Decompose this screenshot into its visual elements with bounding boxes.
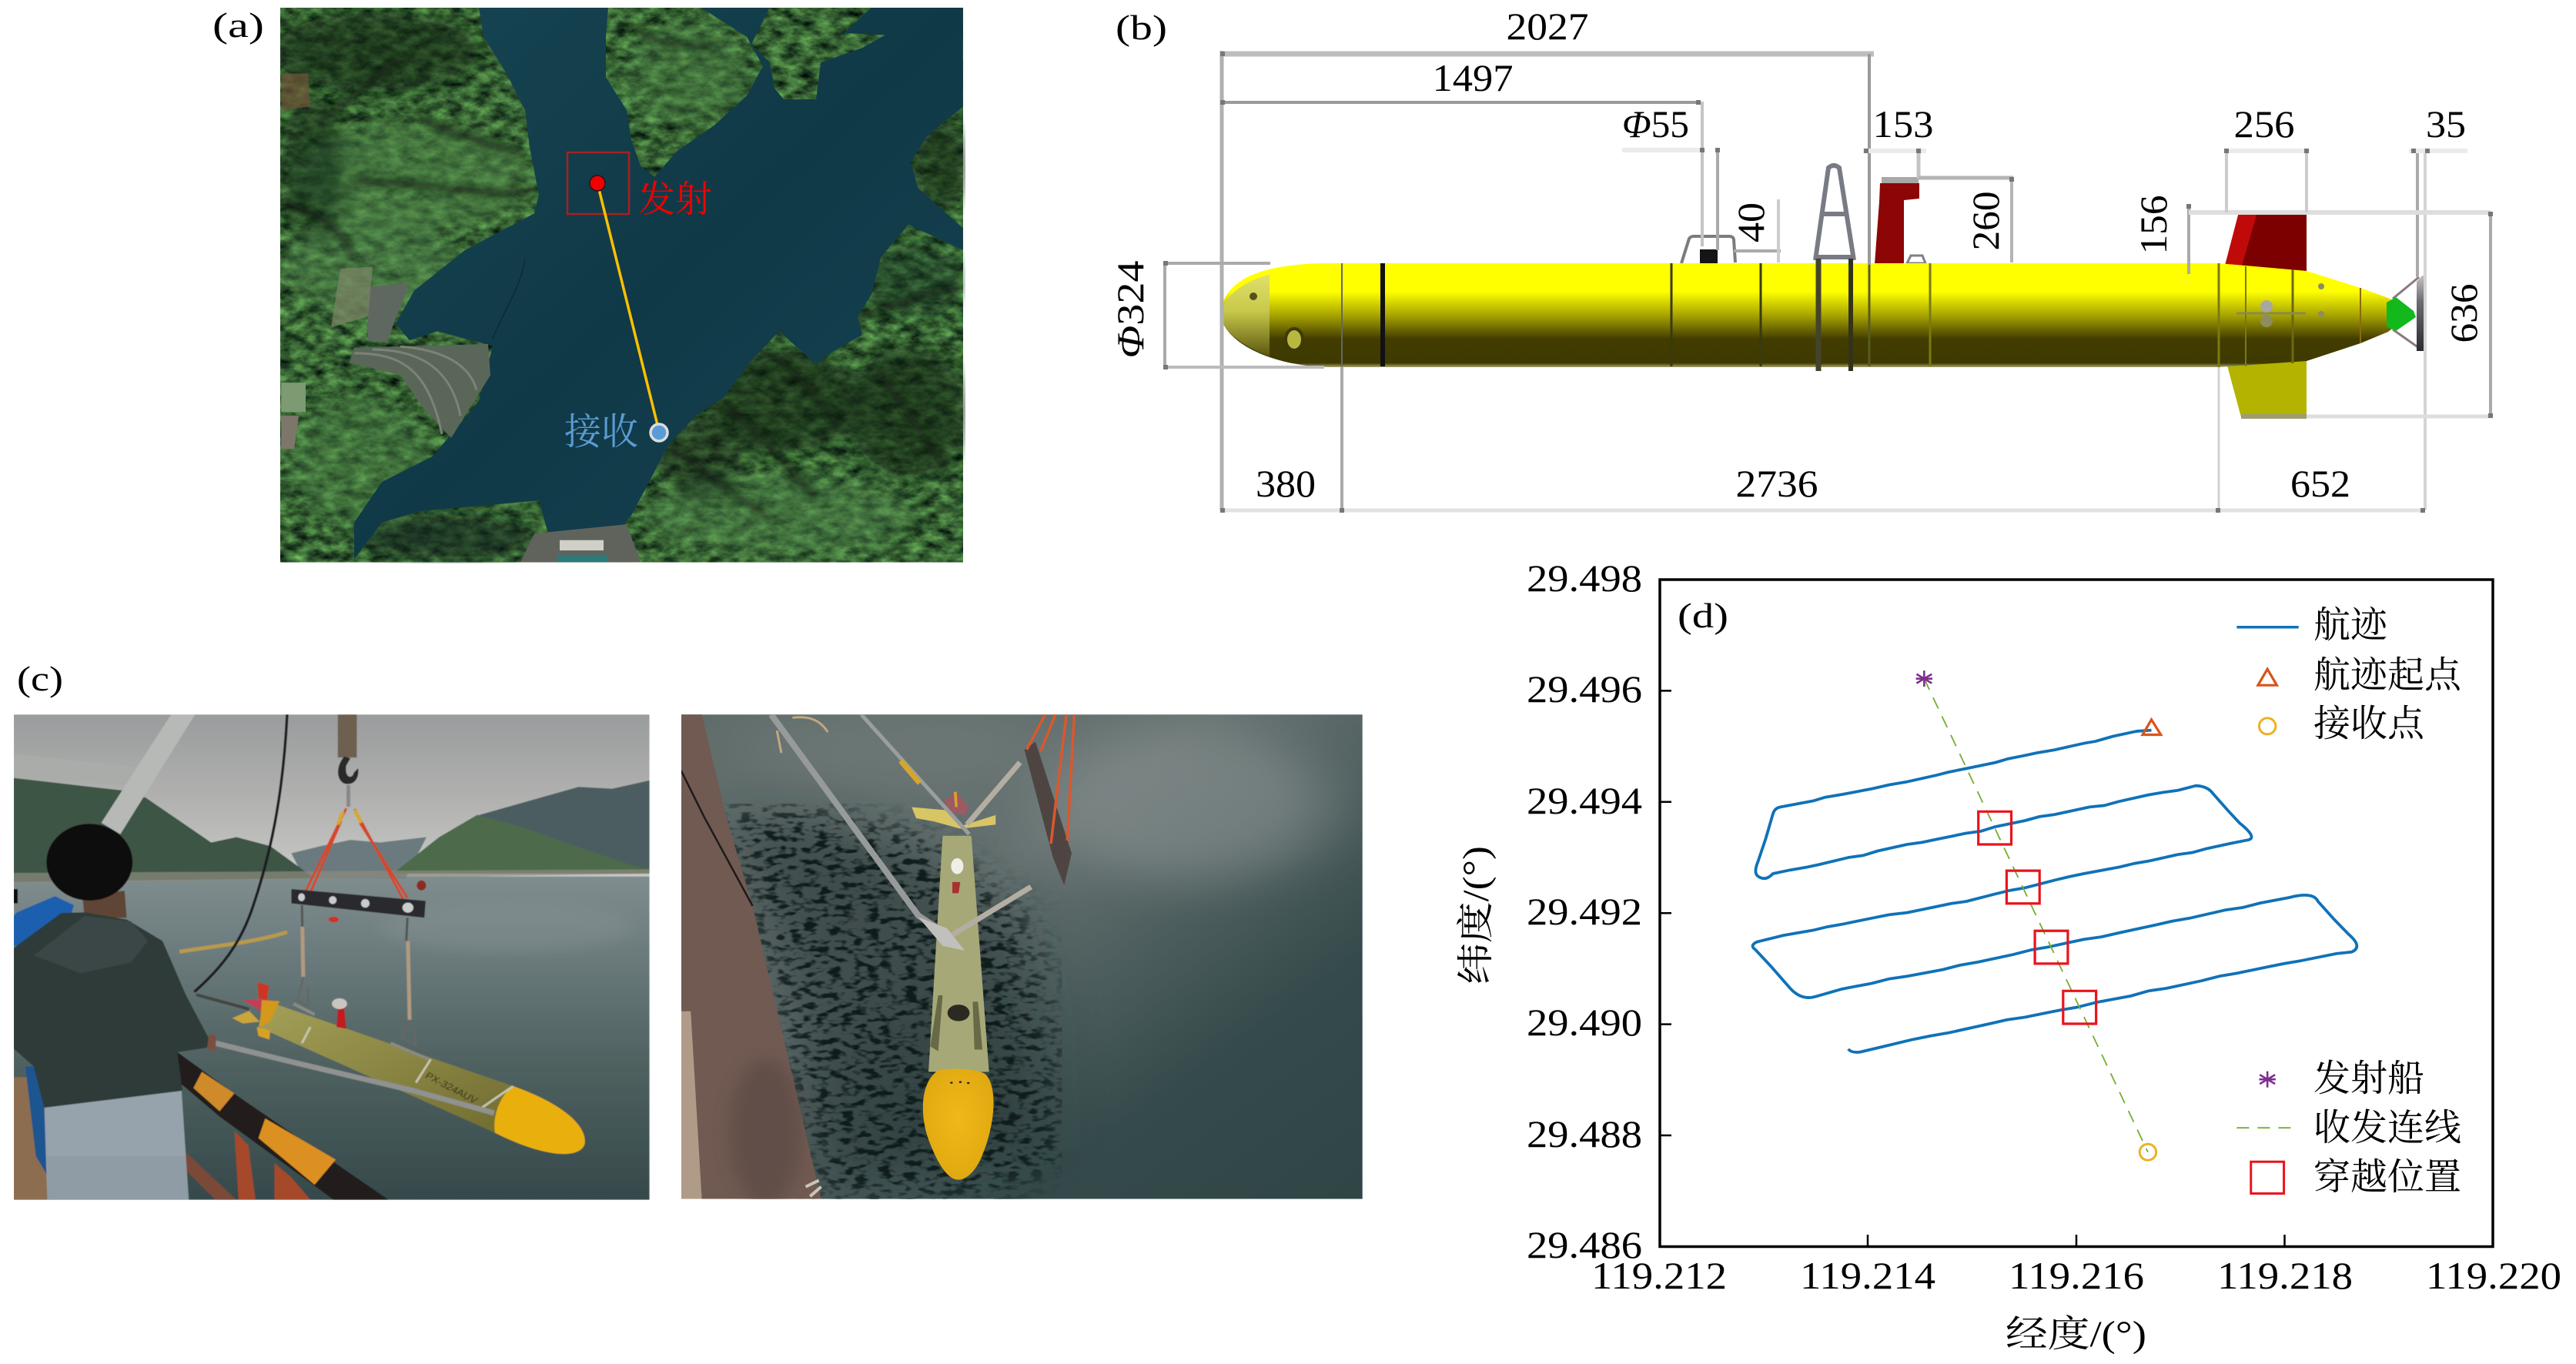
- map marker: receiver point: [651, 424, 667, 441]
- x tick labels: 119.212: [1591, 1254, 1727, 1297]
- legend text: 发射船: [2313, 1058, 2424, 1099]
- transmit ship star: [1916, 670, 1932, 687]
- y tick labels: 29.498: [1527, 557, 1642, 600]
- legend text: 航迹: [2313, 605, 2388, 646]
- map label: launch: 发射: [638, 179, 712, 220]
- dimension values: 156: [2132, 196, 2175, 254]
- legend text: 航迹起点: [2313, 655, 2462, 696]
- legend text: [2313, 605, 2462, 1198]
- y tick labels: 29.490: [1527, 1001, 1642, 1044]
- dimension values: 153: [1872, 102, 1934, 145]
- crossing squares: [1979, 811, 2096, 1024]
- axes frame: [1660, 580, 2493, 1247]
- y axis title: 纬度/(°): [1456, 846, 1497, 985]
- panel c: photo of AUV in water: [681, 711, 1363, 1206]
- panel a: satellite map of the reservoir: [276, 8, 969, 562]
- dimension values: Φ324: [1109, 260, 1152, 359]
- handle: [1681, 236, 1735, 263]
- hull body: [1220, 263, 2414, 367]
- legend text: 接收点: [2313, 704, 2425, 744]
- lifting frame: [1815, 165, 1854, 260]
- dimension values: 256: [2234, 102, 2294, 145]
- track start triangle: [2143, 720, 2161, 735]
- x tick labels: 119.220: [2426, 1254, 2561, 1297]
- panel b: AUV hull drawing: [1220, 165, 2427, 419]
- label: panel (b): (b): [1116, 8, 1167, 47]
- y tick labels: 29.486: [1527, 1223, 1642, 1266]
- dimension values: [1109, 5, 2485, 505]
- dimension values: 2027: [1506, 5, 1589, 48]
- dimension values: 2736: [1735, 462, 1818, 505]
- dimension lines: [1165, 51, 2491, 511]
- fin: upper red: [2225, 212, 2307, 271]
- y tick labels: 29.492: [1527, 890, 1642, 933]
- dimension values: 380: [1256, 462, 1316, 505]
- legend text: 穿越位置: [2313, 1157, 2461, 1198]
- tail fixtures: [2260, 283, 2324, 327]
- x tick labels: [1591, 1254, 2561, 1297]
- dimension values: 1497: [1432, 56, 1514, 99]
- panel c: photo of AUV hoisted over water: PX-324AUV: [423, 1070, 480, 1105]
- legend: track sample: [2236, 626, 2299, 628]
- label: panel (c): (c): [17, 659, 63, 698]
- dimension values: Φ55: [1622, 102, 1689, 145]
- hull joint rings: [1342, 259, 2360, 371]
- dimension values: 636: [2442, 283, 2485, 343]
- receive point circle: [2139, 1144, 2156, 1160]
- x tick labels: 119.218: [2217, 1254, 2353, 1297]
- green tail cone: [2387, 297, 2416, 331]
- panel d: trajectory chart: [1456, 557, 2561, 1355]
- y tick labels: 29.494: [1527, 779, 1642, 822]
- dimension values: 260: [1964, 191, 2007, 251]
- fin: lower yellow: [2227, 359, 2307, 417]
- nose cap: [1220, 275, 1270, 356]
- y tick labels: [1527, 557, 1642, 1266]
- x axis title: 经度/(°): [2006, 1314, 2146, 1355]
- tail hub disk: [2393, 276, 2427, 351]
- label: panel (a): (a): [212, 5, 264, 45]
- map marker: red launch square: [567, 152, 629, 214]
- legend: start sample: [2258, 669, 2277, 685]
- dimension values: 40: [1729, 202, 1772, 242]
- transmit-receive line: [1924, 679, 2148, 1152]
- legend: receive sample: [2259, 718, 2276, 734]
- legend: dashed sample: [2236, 1127, 2299, 1128]
- dimension values: 35: [2426, 102, 2466, 145]
- map label: receive: 接收: [564, 412, 638, 453]
- y tick labels: 29.488: [1527, 1112, 1642, 1155]
- nose ports: [1250, 293, 1303, 350]
- legend: square sample: [2251, 1162, 2284, 1194]
- map marker: launch-to-receiver line: [597, 183, 657, 425]
- antenna mast: [1875, 183, 1919, 264]
- x tick labels: 119.216: [2009, 1254, 2144, 1297]
- y tick labels: 29.496: [1527, 667, 1642, 710]
- legend: ship sample: [2259, 1071, 2276, 1088]
- dimension values: 652: [2290, 462, 2350, 505]
- legend text: 收发连线: [2313, 1108, 2461, 1148]
- label: panel (d): (d): [1678, 596, 1728, 635]
- map marker: launch point: [590, 176, 605, 191]
- panel c: photo of AUV hoisted over water: [14, 714, 650, 1200]
- AUV track: [1753, 730, 2357, 1052]
- x tick labels: 119.214: [1800, 1254, 1935, 1297]
